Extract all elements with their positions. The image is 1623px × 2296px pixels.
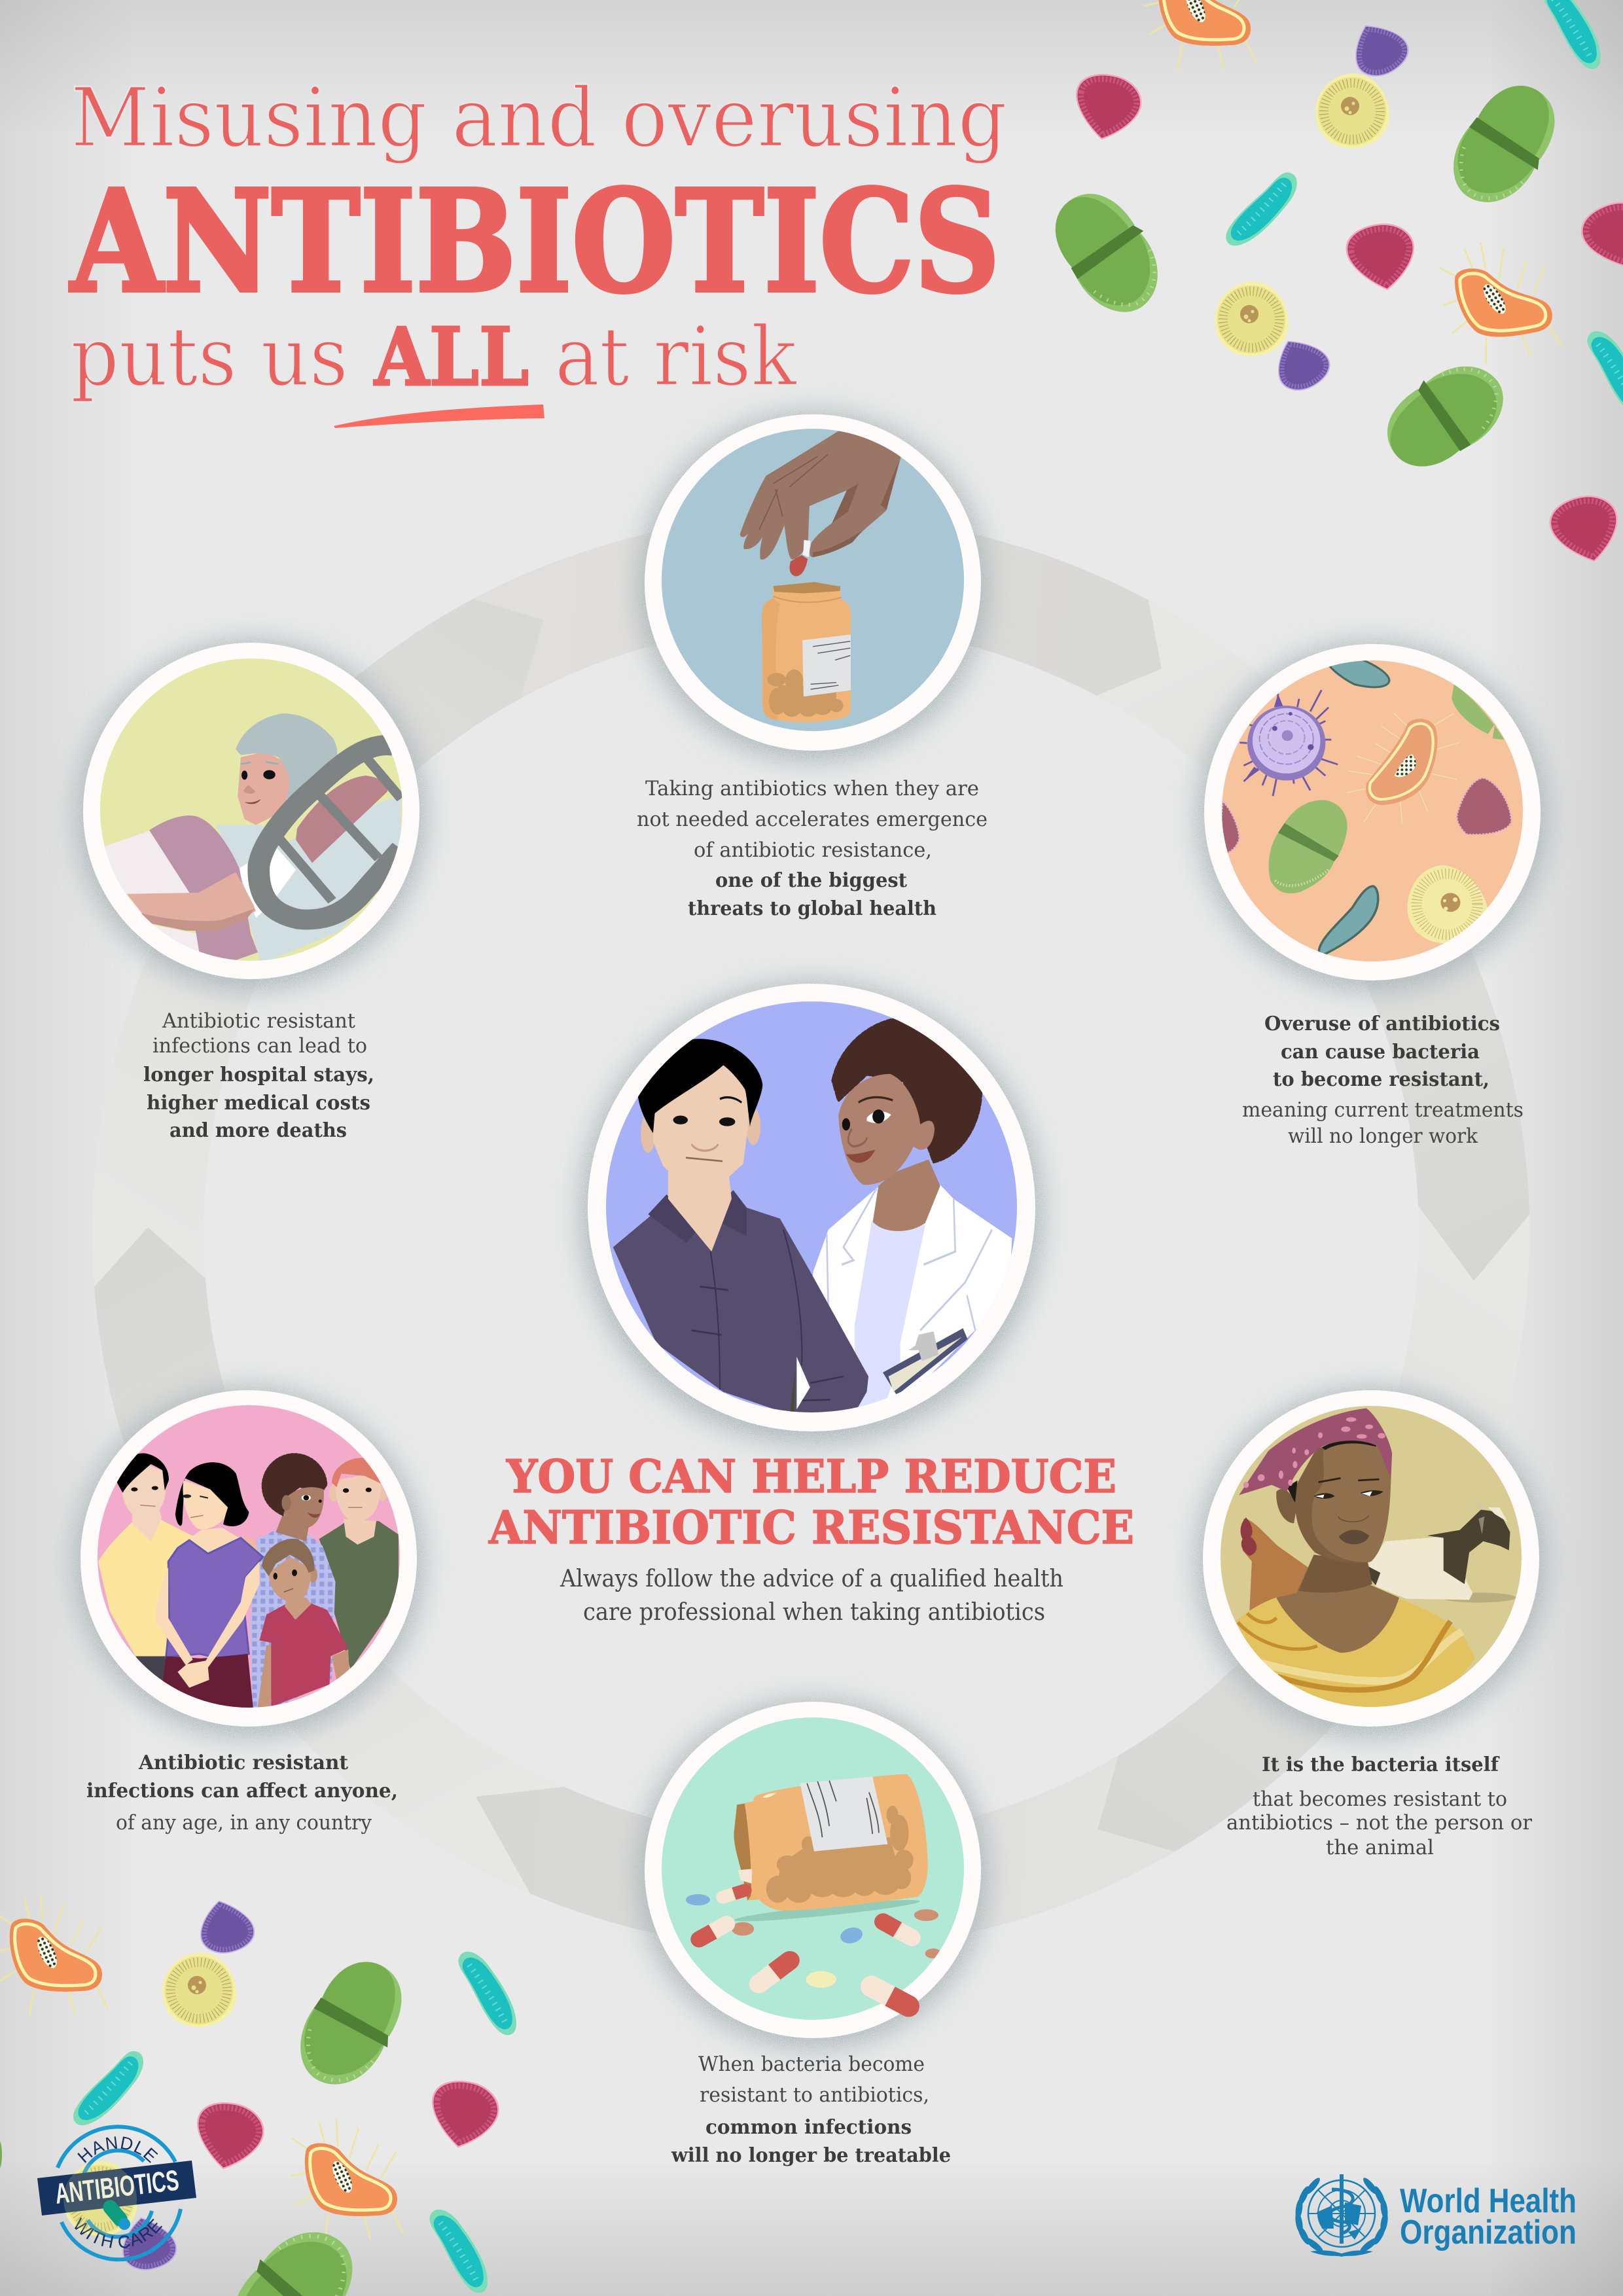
text: taking antibiotics: Taking antibiotics when they are [645, 777, 979, 800]
title [69, 71, 1007, 428]
icon: purple cell [1342, 12, 1416, 86]
badge: handle antibiotics with care [37, 2125, 196, 2262]
medallion: spilled pill bottle [637, 1698, 988, 2049]
icon: bacterium with flagella [1346, 713, 1459, 823]
text: no longer treatable: When bacteria become [698, 2053, 925, 2076]
WHO wordmark [1400, 2182, 1577, 2251]
heading: you can help reduce antibiotic resistance: ANTIBIOTIC RESISTANCE [488, 1501, 1134, 1554]
underline swoosh [334, 404, 544, 428]
pill jar [762, 582, 851, 723]
text: bacteria become resistant: antibiotics – not the person or [1226, 1811, 1532, 1835]
clipboard [883, 1328, 968, 1395]
bottle [734, 1774, 928, 1925]
title line 3: puts us [71, 310, 348, 404]
hair [236, 713, 337, 800]
capsule over rim [857, 1972, 923, 2020]
ear [1276, 1489, 1296, 1523]
medallion: bacteria [1197, 641, 1548, 992]
text: overuse of antibiotics [1242, 1013, 1524, 1148]
capsule held in fingers [789, 540, 811, 576]
medallion: group of people [73, 1387, 424, 1738]
icon: orange bacterium [0, 1894, 108, 2016]
icon: purple cell lower [1265, 328, 1337, 399]
icon: purple cell [192, 1893, 259, 1960]
icon: yellow cell [162, 1952, 236, 2027]
icon: green diplococcus [1037, 176, 1179, 329]
person: woman in purple top [156, 1462, 263, 1713]
icon: orange bacterium right [1435, 233, 1563, 369]
headscarf [1239, 1408, 1392, 1495]
icon: teal rod top [1329, 658, 1389, 687]
icon: red cell far right [1544, 488, 1623, 571]
text: taking antibiotics [637, 777, 988, 920]
text: no longer treatable: resistant to antibiotics, [700, 2083, 929, 2107]
text: taking antibiotics: threats to global health [688, 897, 936, 920]
text: no longer treatable: will no longer be treatable [671, 2144, 951, 2167]
icon: red cell at rim [1219, 802, 1239, 853]
icon: red cell middle [1342, 218, 1421, 296]
text: can affect anyone: Antibiotic resistant [138, 1751, 348, 1774]
hair [638, 1039, 762, 1133]
advice text: care professional when taking antibiotics [583, 1599, 1045, 1626]
icon: orange bacterium lower [291, 2119, 403, 2240]
icon: green diplococcus [284, 1946, 420, 2102]
icon: yellow cell [1315, 73, 1389, 148]
doctor hair [832, 1018, 981, 1162]
scattered bacteria, top right [1037, 0, 1623, 571]
person: boy in red t-shirt [257, 1539, 349, 1712]
medallion: patient and doctor [580, 981, 1043, 1444]
arm [127, 872, 256, 931]
heading: you can help reduce antibiotic resistance: YOU CAN HELP REDUCE [506, 1450, 1116, 1503]
person: woman in gown [250, 1454, 335, 1712]
text: longer hospital stays: Antibiotic resistant [162, 1009, 356, 1033]
text: overuse of antibiotics: to become resistant, [1273, 1068, 1489, 1091]
text: taking antibiotics: one of the biggest [715, 869, 907, 892]
neck [873, 1160, 940, 1231]
logo: World Health Organization [1294, 2174, 1577, 2257]
shirt [1236, 1598, 1475, 1710]
medallion: woman with chicken and goat [1196, 1387, 1546, 1738]
badge: handle antibiotics with care: ANTIBIOTICS [54, 2164, 181, 2210]
icon: green diplococcus [1269, 800, 1347, 893]
icon: teal rod lower [429, 2210, 488, 2293]
heading: you can help reduce antibiotic resistance [488, 1450, 1134, 1554]
text: bacteria become resistant: It is the bacteria itself [1262, 1753, 1500, 1776]
bed sheet [90, 831, 202, 966]
tablets [686, 1894, 942, 1988]
icon: yellow cell lower [1215, 281, 1289, 356]
icon: red cell [1069, 69, 1146, 145]
WHO wordmark: Organization [1400, 2214, 1577, 2251]
icon: red cell [1457, 778, 1511, 834]
ears [641, 1113, 656, 1153]
text: bacteria become resistant: the animal [1326, 1836, 1434, 1859]
doctor face [838, 1074, 935, 1185]
icon: teal rod bottom [1319, 886, 1378, 954]
text: longer hospital stays: and more deaths [169, 1119, 347, 1142]
patient [613, 1039, 868, 1414]
icon: teal rod [458, 1952, 516, 2035]
shoulder [296, 776, 387, 863]
goat [1368, 1499, 1516, 1602]
icon: yellow cell [1407, 865, 1488, 944]
medallion: hand and pill jar [637, 411, 988, 762]
text: taking antibiotics: of antibiotic resistance, [694, 838, 932, 862]
text: taking antibiotics: not needed accelerates emergence [637, 808, 988, 831]
title word ANTIBIOTICS: ANTIBIOTICS [69, 160, 1000, 324]
text: longer hospital stays: higher medical costs [147, 1092, 370, 1115]
badge: handle antibiotics with care: HANDLE [77, 2136, 158, 2163]
advice text: Always follow the advice of a qualified health [560, 1566, 1063, 1592]
icon: red cell [190, 2097, 268, 2175]
chicken [1241, 1518, 1313, 1611]
face [652, 1061, 748, 1191]
shirt [613, 1190, 868, 1414]
title line 3: at risk [555, 310, 797, 404]
scattered bacteria, bottom left [0, 1893, 516, 2296]
icon: teal rod middle [1213, 170, 1309, 248]
icon: red cell at edge [1575, 193, 1623, 279]
text: can affect anyone: infections can affect anyone, [86, 1780, 398, 1803]
hair line [1287, 1439, 1378, 1503]
text: longer hospital stays [143, 1009, 374, 1142]
neck and chest [1276, 1554, 1399, 1653]
icon: green diplococcus right [1437, 70, 1573, 221]
text: overuse of antibiotics: will no longer work [1288, 1124, 1478, 1148]
text: longer hospital stays: longer hospital stays, [143, 1064, 374, 1086]
title line 3 [71, 310, 797, 404]
text: bacteria become resistant: that becomes resistant to [1253, 1787, 1507, 1811]
text: can affect anyone [86, 1751, 398, 1835]
WHO wordmark: World Health [1400, 2182, 1577, 2220]
person: man in green shirt [319, 1458, 399, 1670]
capsules [688, 1869, 924, 1997]
text: no longer treatable [671, 2053, 951, 2167]
icon: teal rod [1543, 0, 1601, 69]
text: overuse of antibiotics: meaning current treatments [1242, 1098, 1524, 1122]
icon: virus [1240, 690, 1338, 796]
icon: yellow cell under badge [63, 2161, 137, 2236]
icon: orange bacterium [1144, 0, 1257, 70]
text: no longer treatable: common infections [705, 2116, 912, 2139]
text: can affect anyone: of any age, in any country [116, 1811, 372, 1835]
hospital gown [216, 794, 401, 964]
icon: green cell at rim [1452, 685, 1505, 740]
icon: hand [740, 429, 901, 560]
medallion: elderly patient in hospital bed [76, 639, 427, 990]
doctor [796, 1018, 1012, 1414]
neck [668, 1168, 732, 1251]
person: man in yellow shirt [98, 1453, 194, 1685]
WHO emblem [1294, 2174, 1389, 2257]
icon: red cell right [425, 2075, 503, 2153]
badge: handle antibiotics with care: WITH CARE [75, 2217, 162, 2248]
bed rail [259, 745, 401, 920]
icon: teal rod left [60, 2049, 156, 2128]
lab coat [796, 1173, 1012, 1414]
blanket [149, 816, 258, 963]
text: bacteria become resistant [1226, 1753, 1532, 1859]
icon: green sliver at edge [0, 2139, 2, 2170]
face [238, 751, 292, 825]
cycle ring of six arrows [92, 515, 1529, 1950]
text: overuse of antibiotics: can cause bacteria [1281, 1041, 1480, 1064]
icon: green diplococcus lower [1370, 346, 1519, 484]
text: longer hospital stays: infections can lead to [152, 1034, 367, 1058]
title line 1: Misusing and overusing [71, 71, 1007, 166]
advice text [560, 1566, 1063, 1626]
title line 3: ALL [374, 310, 529, 404]
face [1295, 1441, 1391, 1564]
text: overuse of antibiotics: Overuse of antibiotics [1264, 1013, 1500, 1035]
icon: purple cell under badge [115, 2210, 181, 2276]
icon: teal rod at edge [1587, 331, 1623, 414]
icon: green diplococcus at edge [211, 2210, 372, 2296]
